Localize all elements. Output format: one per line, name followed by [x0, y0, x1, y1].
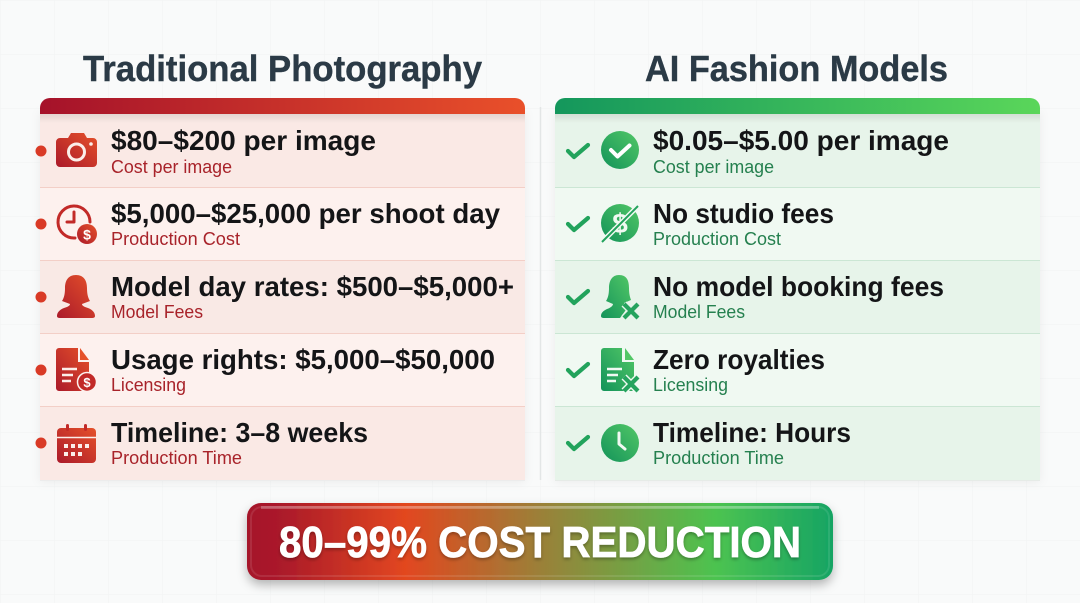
panel header bar: [40, 98, 525, 114]
row: cost per image: Cost per image: [653, 157, 774, 177]
icon: model with cross: [601, 275, 638, 318]
row: cost per image: $80–$200 per image: [111, 125, 376, 156]
icon: model silhouette: [57, 275, 95, 318]
icon: document with dollar: [56, 348, 96, 392]
row: model fees: [568, 271, 944, 322]
row: production cost: No studio fees: [653, 198, 834, 229]
row: cost per image: [568, 125, 949, 177]
row: model fees: [36, 271, 514, 322]
panel: Traditional Photography: [36, 98, 525, 480]
row: model fees: Model Fees: [653, 302, 745, 322]
row: cost per image: $0.05–$5.00 per image: [653, 125, 949, 156]
icon: document with dollar: $: [83, 375, 91, 390]
panel header bar: [555, 98, 1040, 114]
row: licensing: [36, 344, 495, 395]
row: licensing: Licensing: [653, 375, 728, 395]
icon: clock with dollar: $: [83, 226, 91, 242]
row: production time: [36, 417, 368, 468]
icon: crossed out dollar: [601, 204, 639, 242]
panel background rows: [40, 110, 525, 480]
row: production time: Timeline: 3–8 weeks: [111, 417, 368, 448]
row: production cost: [36, 198, 501, 249]
icon: clock with dollar: [58, 206, 97, 244]
icon: check circle: [601, 131, 639, 169]
row: production time: Production Time: [653, 448, 784, 468]
row: production time: Timeline: Hours: [653, 417, 851, 448]
row: licensing: Zero royalties: [653, 344, 825, 375]
row: model fees: Model Fees: [111, 302, 203, 322]
row: licensing: [568, 344, 825, 395]
row: production cost: $5,000–$25,000 per shoot day: [111, 198, 501, 229]
icon: calendar: [57, 424, 96, 463]
row: production time: [568, 417, 851, 468]
panel background rows: [555, 110, 1040, 480]
title: Traditional Photography: Traditional Photography: [83, 48, 482, 89]
callout: cost reduction banner: [247, 503, 833, 580]
icon: clock: [601, 424, 639, 462]
row: cost per image: Cost per image: [111, 157, 232, 177]
row: licensing: Usage rights: $5,000–$50,000: [111, 344, 495, 375]
icon: crossed out dollar: $: [612, 208, 628, 239]
icon: document with cross: [601, 348, 638, 391]
row: production cost: Production Cost: [653, 229, 781, 249]
icon: camera: [56, 133, 97, 167]
row: production cost: Production Cost: [111, 229, 240, 249]
row: licensing: Licensing: [111, 375, 186, 395]
row: cost per image: [36, 125, 376, 177]
row: production cost: [568, 198, 834, 249]
callout: cost reduction banner: 80–99% COST REDUCTION: [279, 518, 801, 567]
title: AI Fashion Models: AI Fashion Models: [645, 48, 948, 89]
row: model fees: Model day rates: $500–$5,000+: [111, 271, 514, 302]
panel: AI Fashion Models: [555, 98, 1040, 480]
row: model fees: No model booking fees: [653, 271, 944, 302]
row: production time: Production Time: [111, 448, 242, 468]
